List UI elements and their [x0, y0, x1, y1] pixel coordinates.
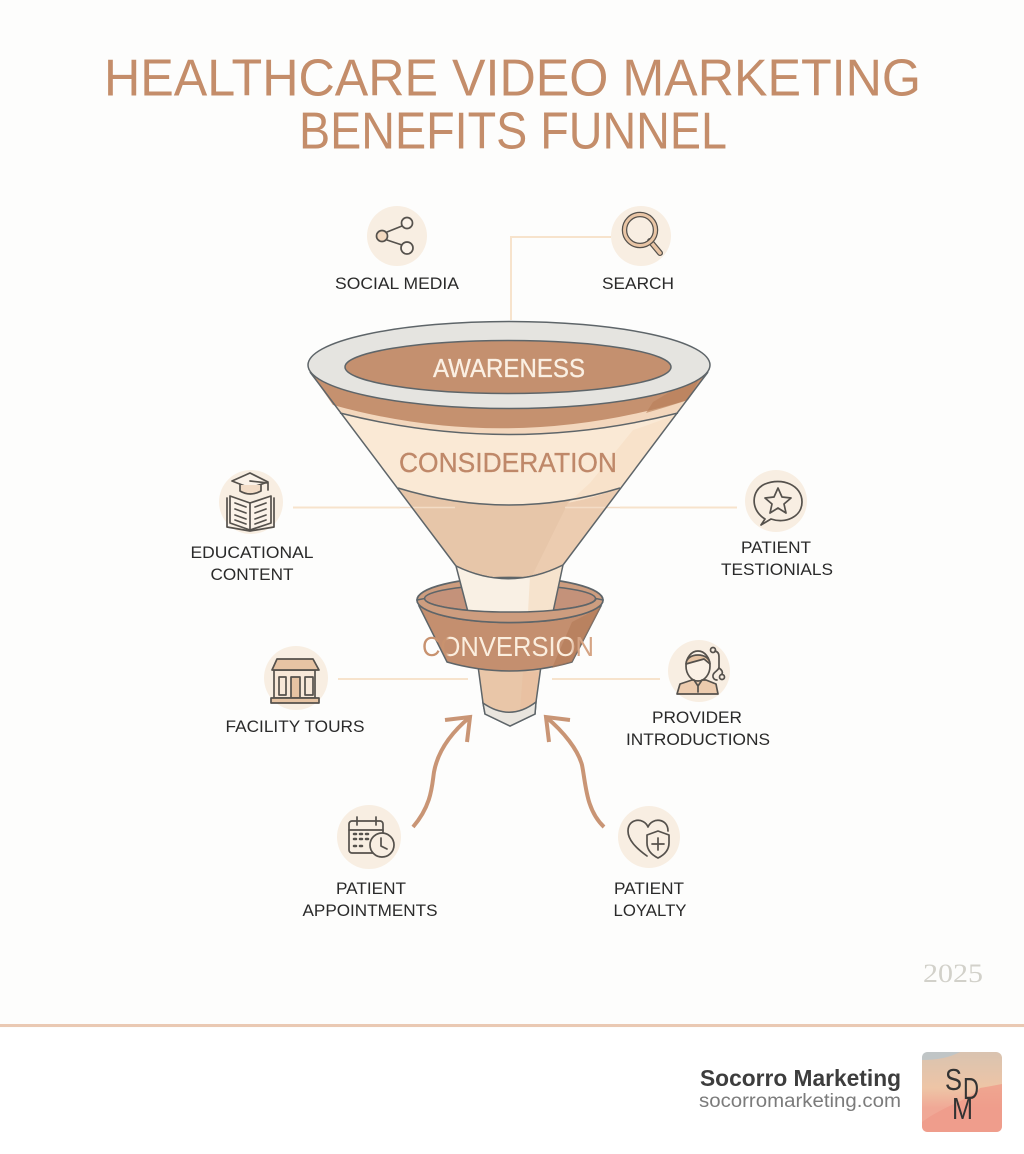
item: facility tours	[226, 646, 364, 736]
item: provider introductions: PROVIDER	[652, 708, 742, 727]
connector lines	[293, 237, 737, 679]
item: provider introductions: INTRODUCTIONS	[626, 730, 770, 749]
logo: M	[952, 1091, 973, 1126]
arrow: appointments to funnel	[413, 717, 470, 827]
conversion collar front lip	[417, 598, 603, 622]
icon: book and cap	[227, 473, 274, 531]
logo: S	[945, 1062, 962, 1097]
conversion label: CONVERSION	[422, 631, 594, 662]
item: patient loyalty: LOYALTY	[614, 901, 686, 920]
item: patient loyalty: PATIENT	[614, 879, 684, 898]
icon: heart and shield	[628, 820, 669, 858]
item: facility tours: FACILITY TOURS	[226, 717, 364, 736]
item: search	[602, 206, 674, 293]
icon: calendar and clock	[349, 817, 394, 857]
item: patient appointments: PATIENT	[336, 879, 406, 898]
item: social media	[335, 206, 460, 293]
title: BENEFITS FUNNEL	[299, 102, 727, 160]
funnel neck	[456, 565, 563, 612]
item: patient loyalty	[614, 806, 686, 920]
icon: doctor with stethoscope	[677, 648, 724, 694]
spout	[478, 666, 541, 726]
icon: magnifier	[624, 214, 660, 253]
arrow: loyalty to funnel	[546, 717, 604, 827]
logo	[922, 1052, 1002, 1132]
item: educational content	[190, 470, 314, 584]
footer	[0, 1024, 1024, 1154]
item: patient testimonials: PATIENT	[741, 538, 811, 557]
item: educational content: CONTENT	[210, 565, 294, 584]
title: HEALTHCARE VIDEO MARKETING	[104, 50, 921, 108]
logo: D	[963, 1071, 979, 1106]
funnel consideration band	[340, 413, 678, 505]
faint lines across funnel	[400, 506, 620, 508]
item: patient testimonials: TESTIONIALS	[721, 560, 833, 579]
item: patient appointments: APPOINTMENTS	[302, 901, 438, 920]
icon: share	[376, 218, 413, 254]
item: patient appointments	[302, 805, 438, 920]
funnel awareness band	[310, 372, 708, 434]
brand url: socorromarketing.com	[699, 1091, 901, 1112]
brand name: Socorro Marketing	[700, 1065, 901, 1091]
funnel section dividers	[398, 488, 620, 579]
funnel rim	[308, 322, 710, 408]
spout tip	[483, 702, 536, 726]
funnel highlights	[568, 413, 678, 503]
awareness label: AWARENESS	[433, 353, 585, 383]
icon: speech bubble with star	[754, 481, 802, 525]
title	[104, 50, 921, 160]
icon: building	[271, 659, 319, 703]
year: 2025	[923, 959, 983, 988]
item: educational content: EDUCATIONAL	[190, 543, 314, 562]
funnel inner ellipse	[345, 340, 671, 394]
conversion collar rim	[417, 578, 603, 622]
consideration label: CONSIDERATION	[399, 447, 617, 478]
item: patient testimonials	[721, 470, 833, 579]
item: social media: SOCIAL MEDIA	[335, 274, 460, 293]
item: provider introductions	[626, 640, 770, 749]
funnel	[308, 322, 710, 726]
funnel lower section	[398, 488, 620, 579]
item: search: SEARCH	[602, 274, 674, 293]
conversion collar cone	[419, 606, 601, 671]
